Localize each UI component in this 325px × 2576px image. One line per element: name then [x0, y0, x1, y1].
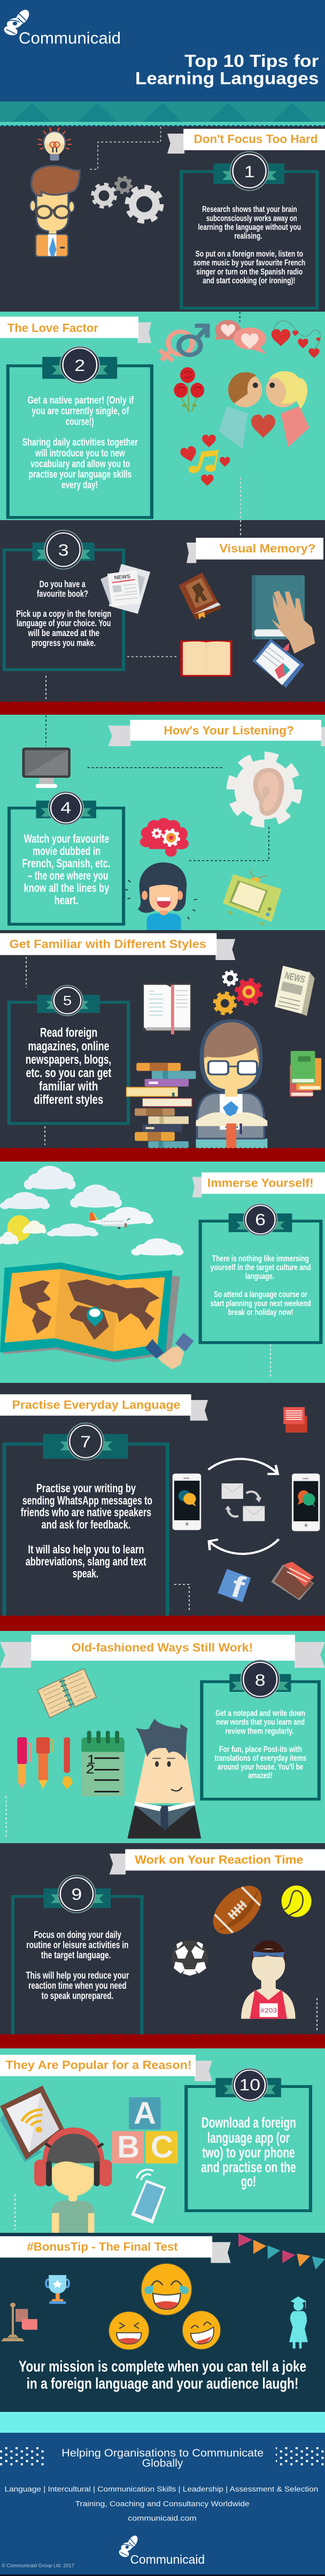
text tip 3: will be amazed at the	[28, 628, 99, 639]
logo: Communicaid	[19, 29, 121, 48]
badge 4	[36, 792, 96, 825]
footer heading: Helping Organisations to Communicate	[61, 2447, 264, 2459]
badge 10: 10	[239, 2076, 260, 2094]
text tip 2: vocabulary and allow you to	[30, 458, 130, 470]
title: Top 10 Tips for	[184, 51, 319, 71]
panel: tip 1 don't focus too hard	[0, 126, 325, 312]
text tip 2: you are currently single, of	[32, 405, 129, 417]
text tip 7: friends who are native speakers	[21, 1506, 151, 1519]
text tip 5: newspapers, blogs,	[26, 1052, 111, 1067]
icon: smartphone	[131, 2170, 166, 2224]
icon: brown book	[179, 573, 221, 620]
text tip 1: realising.	[234, 231, 262, 241]
connector	[89, 127, 160, 169]
icon: three gears	[215, 971, 261, 1014]
heading	[0, 316, 151, 343]
icon: man with glasses	[30, 166, 80, 257]
heading	[187, 538, 323, 563]
icon: bunting	[238, 2233, 325, 2270]
icon: airplane	[88, 1212, 135, 1229]
icon: abc blocks: A	[134, 2096, 156, 2131]
heading	[192, 1172, 325, 1197]
logo	[2, 8, 121, 48]
text tip 2	[22, 394, 138, 491]
text tip 3: language of your choice. You	[17, 618, 111, 629]
badge 10	[215, 2068, 281, 2102]
heading	[0, 1394, 208, 1421]
icon: abc blocks: C	[151, 2130, 173, 2164]
text tip 2: Sharing daily activities together	[22, 437, 138, 448]
decorative teal triangle band	[0, 102, 325, 125]
icon: small notebook	[252, 639, 304, 688]
heading: The Love Factor	[7, 322, 98, 335]
heading: #BonusTip - The Final Test	[27, 2240, 178, 2254]
footer logo	[118, 2534, 205, 2567]
heading: They Are Popular for a Reason!	[5, 2059, 192, 2072]
text tip 7: sending WhatsApp messages to	[22, 1494, 152, 1507]
text tip 6	[211, 1254, 311, 1317]
text tip 5: etc. so you can get	[26, 1065, 111, 1080]
icon: kid with headphones	[34, 2128, 112, 2233]
icon: runner	[241, 1940, 296, 2019]
text tip 8	[214, 1708, 306, 1780]
icon: left phone	[173, 1474, 201, 1530]
icon: soccer ball	[172, 1940, 208, 1976]
badge 7	[43, 1423, 128, 1460]
icon: numbered list notepad: 2	[86, 1761, 94, 1776]
decorative dot pattern right	[276, 2447, 325, 2466]
icon: hearts and music	[179, 435, 230, 486]
panel: tip 3 visual memory	[0, 477, 325, 702]
text tip 2: course!)	[66, 416, 94, 428]
card frame 2	[8, 366, 152, 517]
icon: abc blocks: B	[117, 2130, 140, 2164]
icon: graduate	[289, 2296, 308, 2348]
icon: stack of books	[126, 1063, 196, 1148]
footer services text: communicaid.com	[128, 2515, 197, 2523]
icon: american football	[204, 1877, 270, 1943]
icon: gender symbols	[160, 326, 207, 361]
panel: tip 2 the love factor	[0, 312, 325, 520]
card frame 1	[181, 172, 317, 308]
icon: world map	[0, 1263, 180, 1362]
text tip 2: will introduce you to new	[35, 447, 125, 459]
text tip 3: favourite book?	[37, 589, 88, 599]
heading	[110, 1849, 325, 1875]
heading: Work on Your Reaction Time	[135, 1853, 303, 1867]
heading	[0, 2236, 231, 2263]
text tip 3: Do you have a	[40, 579, 86, 590]
text tip 7: It will also help you to learn	[28, 1543, 144, 1557]
text tip 4: know all the lines by	[24, 881, 110, 895]
badge 2	[42, 346, 117, 383]
badge 9	[43, 1875, 111, 1913]
icon: gears	[93, 177, 161, 221]
icon: ear in gear	[233, 758, 296, 821]
text tip 3	[16, 579, 111, 648]
title	[135, 51, 319, 88]
text tip 9: reaction time when you need	[28, 1981, 127, 1991]
panel: tip 9 work on your reaction time	[0, 1843, 325, 2047]
badge 8	[229, 1660, 291, 1699]
badge 2: 2	[74, 357, 85, 375]
emoji: grinning	[182, 2311, 221, 2349]
heading: Visual Memory?	[219, 542, 315, 555]
footer services text	[5, 2485, 318, 2523]
text tip 4: heart.	[55, 894, 79, 907]
heading	[0, 933, 235, 960]
badge 9: 9	[72, 1885, 82, 1904]
icon: happy woman	[125, 862, 197, 930]
text tip 1	[194, 204, 305, 285]
text tip 4: French, Spanish, etc.	[22, 857, 110, 870]
badge 8: 8	[255, 1672, 266, 1690]
icon: numbered list notepad: 1	[87, 1752, 95, 1767]
icon: television	[223, 870, 282, 926]
panel: tip 6 immerse yourself	[0, 1162, 325, 1383]
icon: sun	[7, 1215, 32, 1241]
badge 3: 3	[58, 541, 69, 560]
icon: man reading	[196, 1019, 267, 1160]
icon: rolled newspaper	[275, 966, 315, 1016]
heading: Get Familiar with Different Styles	[9, 938, 206, 951]
text tip 3: progress you make.	[32, 638, 96, 648]
icon: monitor	[22, 747, 71, 788]
panel: bonus tip the final test	[0, 2233, 325, 2412]
icon: brain with gears	[140, 818, 189, 857]
icon: facebook	[218, 1569, 251, 1605]
card frame 5	[9, 1002, 128, 1124]
badge 7: 7	[80, 1433, 91, 1451]
icon: trophy	[46, 2275, 69, 2304]
card frame 7	[4, 1444, 167, 1675]
emoji: crying with laughter	[141, 2263, 192, 2315]
badge 5: 5	[63, 993, 72, 1008]
icon: envelopes	[222, 1483, 265, 1521]
heading	[167, 129, 325, 153]
card frame 9	[13, 1897, 142, 2047]
text tip 3: Pick up a copy in the foreign	[16, 608, 111, 620]
footer services text: Training, Coaching and Consultancy Worldwide	[75, 2500, 250, 2508]
red band	[0, 1148, 325, 1162]
text tip 9: routine or leisure activities in	[26, 1940, 128, 1951]
icon: flag	[1, 2303, 37, 2341]
icon: couple	[219, 371, 309, 449]
red band	[0, 1616, 325, 1631]
text tip 9	[26, 1930, 129, 2001]
text tip 8: amazed!	[248, 1770, 273, 1780]
text tip 5	[26, 1025, 111, 1107]
icon: abc blocks	[112, 2096, 178, 2164]
icon: businessman	[127, 1719, 201, 1838]
panel: tip 10 they are popular for a reason	[0, 2048, 325, 2233]
badge 4: 4	[60, 799, 71, 817]
badge 6	[229, 1204, 292, 1235]
text tip 7: Practise your writing by	[36, 1482, 136, 1495]
icon: light bulb	[38, 127, 72, 160]
text tip 4: – the one where you	[28, 869, 108, 883]
text tip 9: the target language.	[41, 1950, 111, 1961]
text tip 5: familiar with	[39, 1079, 98, 1094]
icon: facebook: f	[227, 1569, 249, 1605]
card frame 3	[4, 550, 123, 670]
panel: tip 8 old-fashioned ways still work	[0, 1631, 325, 1843]
icon: newspaper	[100, 564, 150, 614]
text tip 7: abbreviations, slang and text	[26, 1555, 146, 1568]
heading	[108, 720, 325, 746]
card frame 8	[202, 1682, 319, 1799]
badge 5	[37, 985, 100, 1016]
panel: tip 5 get familiar with different styles	[0, 930, 325, 1160]
icon: envelope red and brown	[271, 1562, 314, 1600]
text tip 4	[22, 832, 110, 907]
text tip 7	[21, 1482, 152, 1581]
text tip 4: Watch your favourite	[24, 832, 109, 846]
icon: hand on blue book	[252, 575, 315, 654]
text tip 5: different styles	[34, 1092, 103, 1107]
icon: open red book	[180, 640, 232, 677]
text tip 7: and ask for feedback.	[42, 1518, 130, 1531]
emoji: squinting laugh	[109, 2311, 149, 2350]
badge 1	[213, 152, 284, 190]
text tip 10: go!	[241, 2173, 256, 2190]
red band	[0, 2035, 325, 2048]
badge 3	[32, 530, 95, 569]
text tip 2: Get a native partner! (Only if	[28, 394, 134, 406]
icon: roses	[174, 367, 204, 413]
footer heading: Globally	[142, 2457, 183, 2469]
icon: numbered list notepad	[81, 1731, 125, 1797]
heading: How's Your Listening?	[164, 724, 294, 738]
red band	[0, 702, 325, 715]
copyright: © Communicaid Group Ltd. 2017	[2, 2563, 74, 2569]
panel: tip 7 practise everyday language	[0, 1383, 325, 1675]
text tip 2: practise your language skills	[29, 469, 131, 480]
heading	[0, 2055, 212, 2081]
text tip 5: magazines, online	[28, 1039, 109, 1054]
icon: speech bubbles with hearts	[215, 320, 266, 354]
icon: tennis ball	[282, 1885, 312, 1917]
panel: tip 4 how's your listening	[0, 715, 325, 930]
icon: handshake	[145, 1333, 194, 1370]
icon: runner: #203	[260, 2007, 277, 2014]
footer logo: Communicaid	[130, 2554, 205, 2567]
badge 6: 6	[255, 1211, 266, 1229]
card frame 6	[200, 1221, 321, 1343]
text tip 10	[201, 2115, 296, 2190]
icon: tablet with wifi	[0, 2086, 64, 2162]
footer heading	[61, 2447, 264, 2469]
text tip 7: speak.	[73, 1567, 98, 1581]
icon: exchange arrows	[208, 1459, 279, 1554]
card frame 10	[186, 2086, 311, 2211]
text tip 9: This will help you reduce your	[26, 1970, 129, 1981]
text bonus	[19, 2358, 306, 2392]
text tip 4: movie dubbed in	[33, 845, 100, 858]
icon: newspaper: NEWS	[114, 574, 130, 581]
icon: open book	[143, 983, 192, 1034]
card frame 4	[9, 808, 123, 924]
badge 1: 1	[244, 163, 254, 181]
cyan band	[0, 2412, 325, 2433]
icon: small book pile	[290, 1051, 321, 1097]
text tip 6: language.	[245, 1271, 274, 1281]
icon: right phone	[292, 1474, 320, 1531]
text tip 5: Read foreign	[40, 1025, 97, 1040]
icon: clouds	[0, 1166, 183, 1256]
text tip 9: Focus on doing your daily	[34, 1930, 121, 1940]
heading: Old-fashioned Ways Still Work!	[72, 1641, 253, 1654]
icon: pens	[17, 1737, 73, 1789]
icon: rolled newspaper: NEWS	[283, 970, 306, 985]
panel: footer	[0, 2433, 325, 2576]
icon: heart vine	[272, 321, 320, 358]
text tip 9: to speak unprepared.	[42, 1991, 113, 2001]
heading: Immerse Yourself!	[207, 1177, 314, 1190]
icon: spiral notebook	[38, 1669, 96, 1718]
heading: Practise Everyday Language	[12, 1398, 180, 1412]
decorative dot pattern left	[0, 2447, 44, 2466]
icon: red chat bubbles	[283, 1407, 307, 1433]
text tip 2: every day!	[61, 479, 98, 491]
heading	[0, 1635, 325, 1668]
panel: header	[0, 0, 325, 102]
